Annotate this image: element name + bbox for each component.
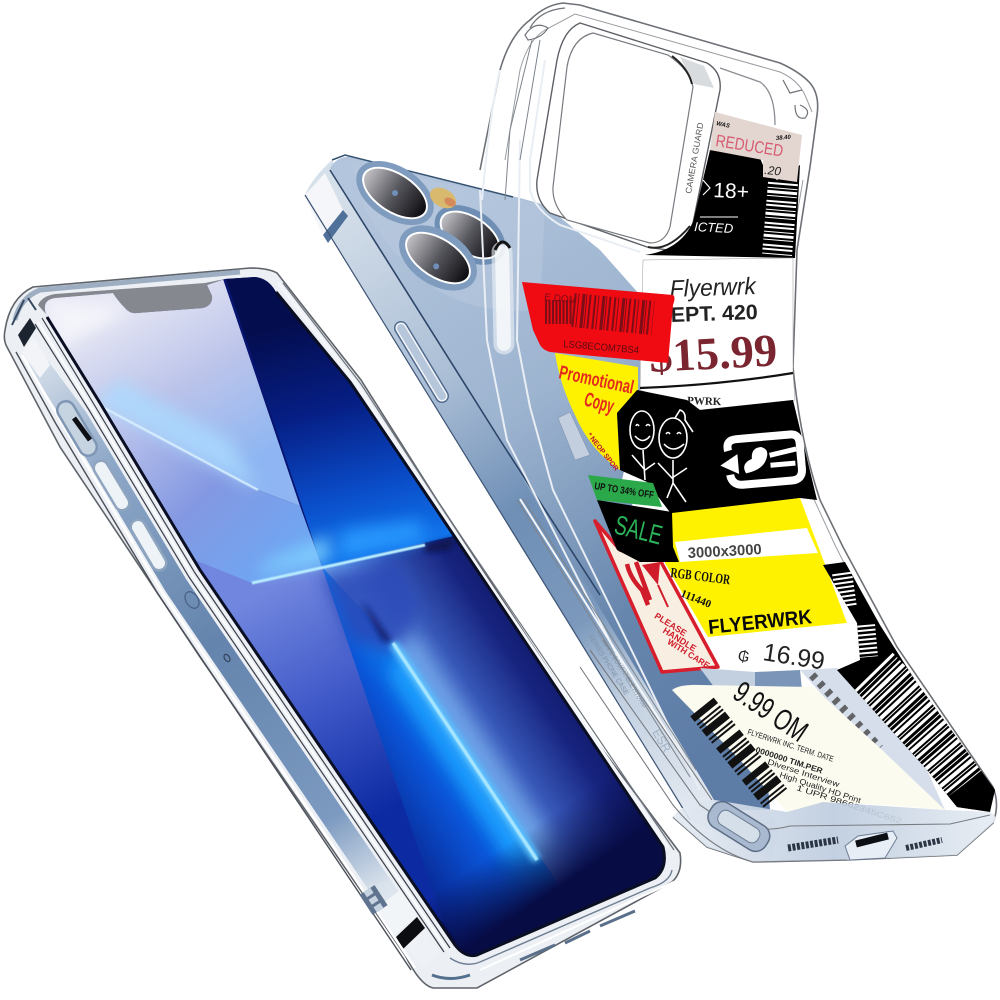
sticker: big yellow label: RGB COLOR (670, 566, 732, 588)
sticker: red barcode: LSG8ECOM7BS4 (563, 339, 640, 357)
clear case: back view (480, 3, 996, 862)
screen top quadrant (226, 277, 452, 567)
case inner band lines (580, 640, 990, 862)
sticker: black SALE: SALE (612, 510, 665, 550)
ray 3 soft halo (393, 643, 537, 860)
sticker: big yellow label: 111440 (679, 588, 713, 611)
darkening past end of ray 3 (429, 784, 663, 954)
sticker: big yellow label: FLYERWRK (707, 606, 813, 639)
sticker: REDUCED (710, 112, 802, 182)
corner camera-like module (703, 797, 774, 856)
sticker: Flyerwrk price label (640, 258, 795, 410)
sticker: 16.99 white: 16.99 (761, 638, 827, 676)
lens: top (345, 148, 445, 238)
inner top recess (720, 68, 775, 125)
sticker: red barcode: E DOM (544, 292, 577, 306)
second outline (505, 14, 985, 790)
speaker slot right (906, 840, 942, 848)
screen left quadrant (322, 568, 558, 938)
region: blue gap above ticket (755, 670, 802, 690)
side button (401, 328, 442, 396)
stickers on case (522, 112, 1000, 826)
white and black patches near bottom of band (377, 890, 418, 935)
sticker: Flyerwrk price label: $15.99 (648, 324, 778, 382)
white patch near top of band (22, 337, 50, 378)
dark ray tails (362, 602, 393, 643)
CAMERA GUARD text: CAMERA GUARD (683, 122, 705, 194)
ray 3 (393, 643, 537, 860)
case corner details (525, 8, 808, 118)
sticker: PLEASE HANDLE WITH CARE: WITH CARE (666, 636, 712, 671)
bezel and notch (38, 279, 225, 330)
sticker: PLEASE HANDLE WITH CARE (595, 521, 718, 672)
side label text on case: ESR (649, 726, 674, 755)
phone side strip (305, 160, 780, 860)
sticker: ticket 9.99 OM: 1 UPR 98662345C652 (795, 783, 903, 826)
icon: recycling arrows (718, 434, 803, 487)
sticker: green UP TO 34% OFF (588, 475, 662, 507)
sticker: ticket 9.99 OM: FLYERWRK INC. TERM. DATE (746, 727, 835, 764)
sticker: black smiley + recycle (617, 390, 817, 515)
sticker: REDUCED: WAS (716, 121, 730, 130)
white upper segment of side (305, 173, 343, 235)
sticker: Flyerwrk price label: Flyerwrk (669, 273, 758, 303)
speaker slot left (788, 840, 838, 848)
lens: bottom (387, 212, 489, 304)
sticker: red barcode (522, 282, 674, 363)
sticker: ticket 9.99 OM (672, 675, 945, 826)
side buttons (66, 410, 380, 910)
outer case (4, 268, 681, 988)
case inner contour lines (480, 60, 700, 790)
camera bump (352, 163, 545, 311)
side blue band (28, 350, 441, 967)
side label text on case: MAGSAFE COMPATIBLE HYBRID (594, 629, 648, 709)
sticker: ticket 9.99 OM: 0000000 TIM.PER (754, 745, 824, 776)
sticker: PLEASE HANDLE WITH CARE: PLEASE (653, 611, 689, 638)
glass zone lower (196, 560, 444, 924)
sticker: big yellow label: 3000x3000 (687, 541, 762, 562)
sticker: yellow Promotional Copy: * NEOP SPOR (585, 432, 619, 473)
glow ray 3 (390, 655, 537, 860)
volume up (101, 468, 122, 503)
sticker: REDUCED: .20 (764, 163, 782, 178)
volume down (138, 527, 159, 563)
sticker: ticket 9.99 OM: High Quality HD Print (778, 770, 863, 805)
sticker: yellow Promotional Copy (555, 353, 638, 473)
sticker: black SALE (597, 500, 679, 562)
small logo plate behind stickers (558, 412, 590, 460)
lower clip (367, 890, 380, 910)
sticker: 18+ black label (645, 150, 800, 258)
glass zone middle (106, 409, 322, 583)
side label text on case (586, 629, 674, 755)
camera guard outer ring (537, 23, 720, 250)
silent switch (66, 410, 88, 447)
charging port (845, 831, 897, 860)
case side button (502, 252, 504, 344)
sticker: PLEASE HANDLE WITH CARE: HANDLE (661, 625, 698, 654)
camera opening (553, 33, 693, 243)
small oval marks (182, 589, 202, 611)
sticker: big yellow label (665, 498, 847, 639)
screen right quadrant (324, 536, 622, 882)
glass soft glow (45, 300, 130, 345)
sticker: 18+ black label: ICTED (694, 219, 734, 236)
phone back face (330, 157, 770, 810)
glass zone upper (30, 270, 300, 506)
screen border (47, 292, 664, 956)
sticker: ticket 9.99 OM: 9.99 OM (727, 675, 814, 749)
sticker: yellow Promotional Copy: Promotional (557, 362, 636, 399)
top bumper texture (15, 272, 240, 320)
blurred label marks (812, 675, 880, 748)
screen (44, 277, 663, 954)
ray 2 (252, 545, 425, 583)
region: pale blue gap above ticket (700, 668, 755, 695)
barcode strip right (820, 560, 1000, 820)
region: pale area right of ticket (800, 668, 945, 810)
sticker: 18+ black label: 18+ (713, 179, 750, 204)
case edge lines (16, 283, 674, 970)
muted area ahead of ray 3 (322, 560, 420, 655)
front phone with clear case (4, 267, 682, 989)
bottom edge details (432, 870, 678, 978)
sticker: REDUCED: REDUCED (714, 131, 785, 161)
sticker: 16.99 white (708, 623, 860, 676)
sticker: Flyerwrk price label: EPT. 420 (670, 301, 758, 327)
stick figures (630, 410, 693, 502)
flash (426, 183, 460, 213)
ring shading (680, 57, 714, 88)
sticker: ticket 9.99 OM: Diverse Interview (766, 757, 841, 789)
side label text on case: SERIES PHONE CASE (586, 633, 629, 697)
sticker: 16.99 white: ₲ (736, 647, 751, 666)
ray 1 (93, 402, 258, 490)
sticker: green UP TO 34% OFF: UP TO 34% OFF (594, 481, 655, 501)
bottom lip (673, 800, 996, 862)
sticker: REDUCED: 38.40 (776, 135, 792, 142)
sticker: Flyerwrk price label: PWRK (687, 395, 722, 408)
lens: right (424, 193, 516, 277)
face dark edge (330, 170, 600, 595)
case outline (480, 3, 996, 862)
case bottom edge and ports (580, 640, 996, 862)
sticker: yellow Promotional Copy: Copy (582, 389, 617, 418)
back phone: blue iPhone seen through case (305, 148, 780, 860)
